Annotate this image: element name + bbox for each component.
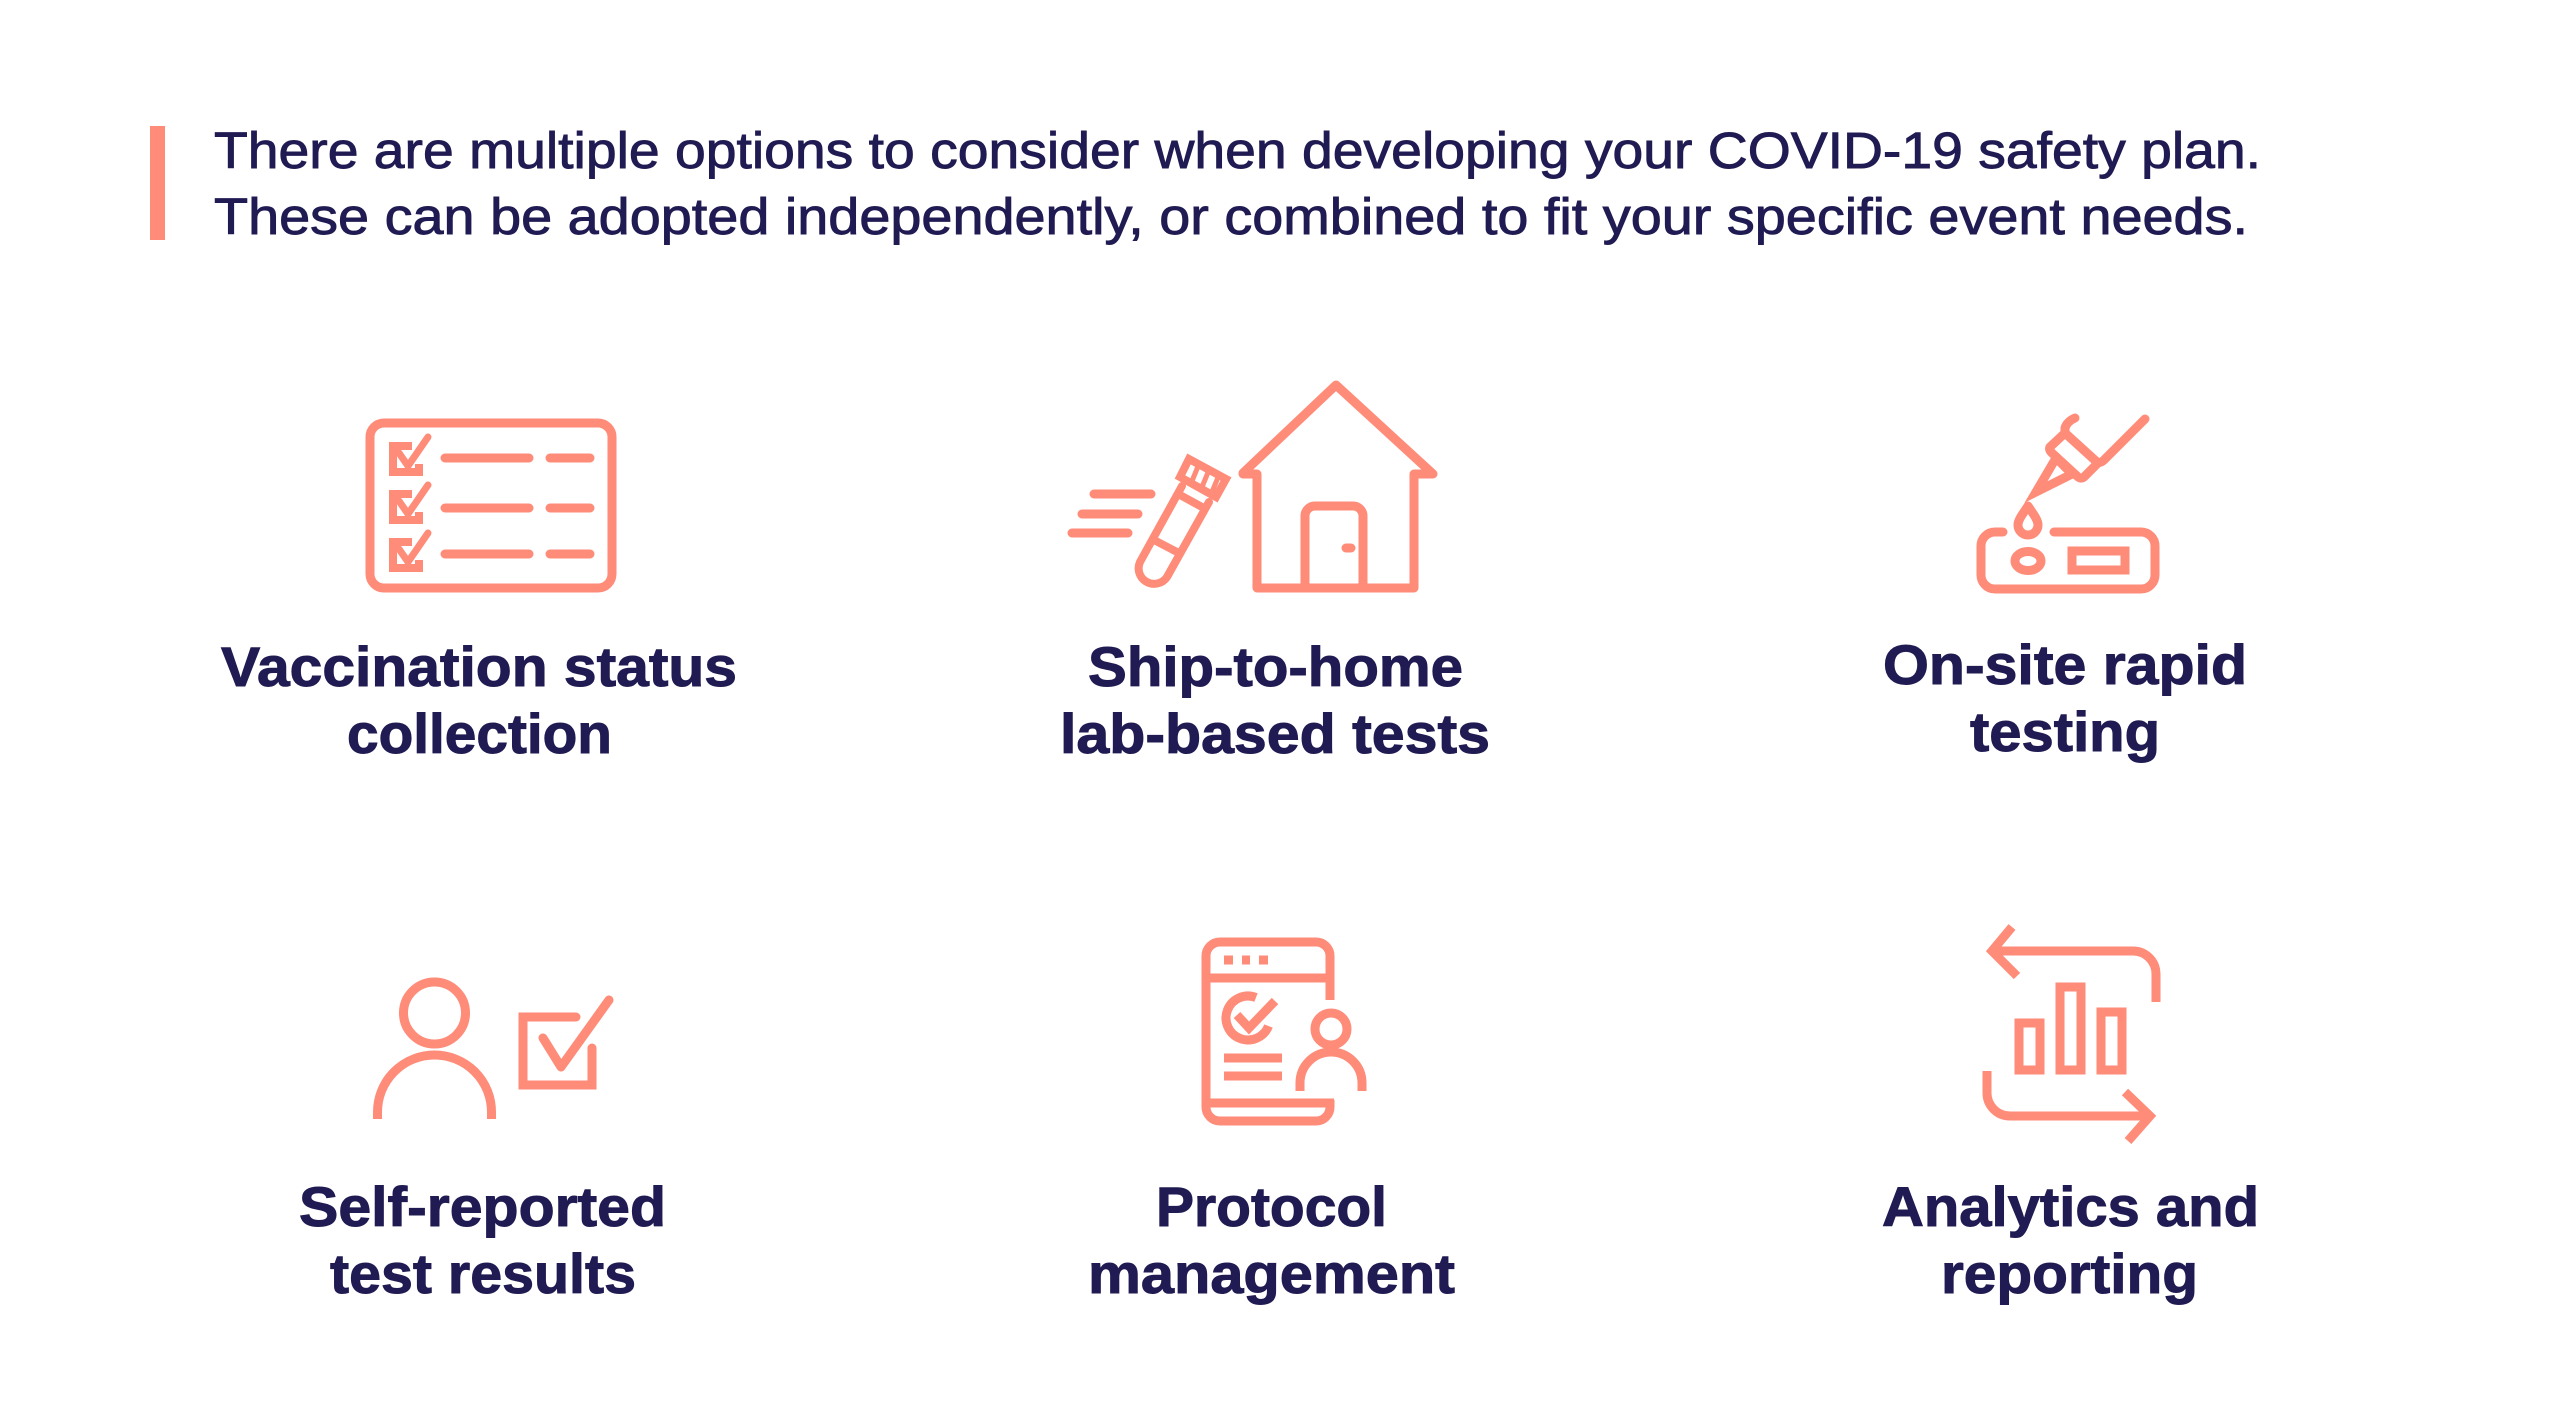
label: Vaccination status [221, 635, 737, 698]
label: Protocol [1156, 1175, 1387, 1238]
panel: protocol management [1088, 942, 1455, 1305]
label [299, 1175, 666, 1305]
panel: on-site rapid testing [1883, 418, 2247, 763]
label [1882, 1175, 2259, 1305]
label: management [1088, 1242, 1455, 1305]
label: reporting [1941, 1242, 2198, 1305]
icon: bar chart with cycle arrows [1987, 927, 2156, 1141]
intro panel [150, 122, 2261, 245]
icon: mobile screen with check and person [1206, 942, 1362, 1121]
panel: ship-to-home lab-based tests [1060, 385, 1490, 765]
intro text: There are multiple options to consider when developing your COVID-19 safety plan. [214, 122, 2261, 179]
label [1883, 633, 2247, 763]
panel: analytics and reporting [1882, 927, 2259, 1305]
intro text: These can be adopted independently, or combined to fit your specific event needs. [214, 188, 2248, 245]
intro text [214, 122, 2261, 245]
panel: self-reported test results [299, 982, 666, 1305]
icon: house and test tube [1072, 385, 1433, 588]
icon: checklist card [370, 423, 612, 588]
label: testing [1970, 700, 2160, 763]
label: Ship-to-home [1088, 635, 1463, 698]
label [1088, 1175, 1455, 1305]
label: test results [330, 1242, 636, 1305]
label: lab-based tests [1060, 702, 1490, 765]
accent bar [150, 126, 165, 240]
label: Self-reported [299, 1175, 666, 1238]
label: collection [347, 702, 612, 765]
label: Analytics and [1882, 1175, 2259, 1238]
panel: vaccination status collection [221, 423, 737, 765]
label [1060, 635, 1490, 765]
icon: pipette and test cassette [1981, 418, 2155, 589]
icon: person and checkbox [378, 982, 609, 1119]
label [221, 635, 737, 765]
label: On-site rapid [1883, 633, 2247, 696]
